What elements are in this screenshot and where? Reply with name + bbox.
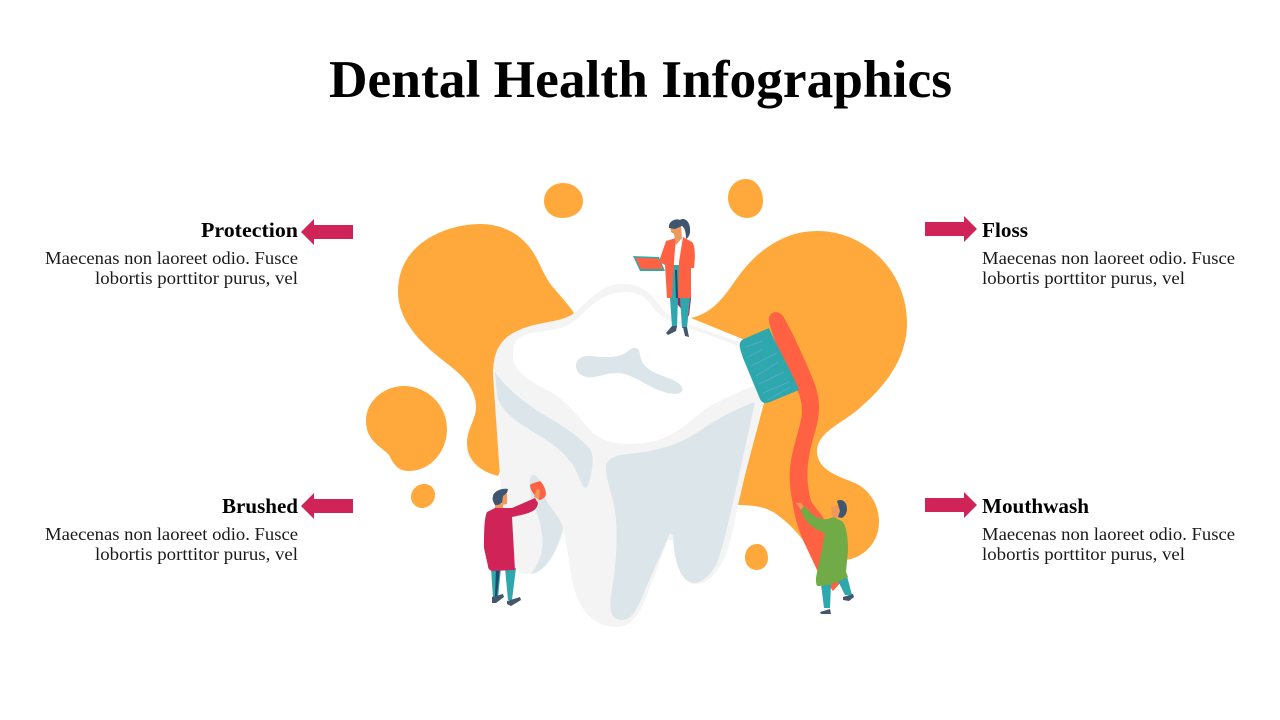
character: man cleaning tooth bbox=[484, 481, 546, 606]
brush bristles bbox=[740, 328, 799, 403]
face bbox=[831, 505, 842, 519]
tablet bbox=[633, 256, 665, 271]
description: Maecenas non laoreet odio. Fusce bbox=[45, 524, 298, 544]
character: woman with tablet bbox=[633, 219, 695, 337]
trousers bbox=[672, 298, 691, 316]
item: Brushed bbox=[45, 494, 298, 564]
toothbrush bbox=[740, 312, 841, 591]
face bbox=[501, 494, 507, 505]
tooth shading: top groove bbox=[576, 348, 682, 394]
cleaning cloth bbox=[530, 481, 546, 500]
shirt bbox=[674, 238, 683, 265]
heading: Protection bbox=[201, 218, 298, 242]
shoes bbox=[492, 594, 521, 606]
shoes bbox=[666, 326, 689, 337]
heading: Brushed bbox=[222, 494, 298, 518]
arrow: Mouthwash bbox=[925, 492, 977, 518]
item: Floss bbox=[982, 218, 1235, 288]
heading: Floss bbox=[982, 218, 1028, 242]
item: Brushed: lobortis porttitor purus, vel bbox=[95, 544, 298, 564]
orange blob: right bbox=[691, 231, 907, 570]
raised hand bbox=[796, 503, 806, 511]
tooth shading: right root bbox=[606, 402, 755, 620]
shoes bbox=[820, 594, 854, 614]
orange drop: top left bbox=[544, 183, 583, 218]
arrow: Protection bbox=[301, 219, 353, 245]
coat bbox=[659, 237, 695, 298]
orange drop: left circle bbox=[366, 386, 447, 471]
orange blob: left bbox=[398, 224, 574, 476]
hair bbox=[669, 219, 690, 239]
illustration: tooth with characters bbox=[366, 179, 907, 627]
orange drop: lower left bbox=[411, 484, 435, 508]
description: Maecenas non laoreet odio. Fusce bbox=[45, 248, 298, 268]
orange drop: lower right bbox=[745, 544, 768, 570]
tooth body bbox=[493, 284, 765, 627]
neck and face bbox=[670, 226, 682, 245]
item: Protection bbox=[45, 218, 298, 288]
description: Maecenas non laoreet odio. Fusce bbox=[982, 524, 1235, 544]
item: Mouthwash: lobortis porttitor purus, vel bbox=[982, 544, 1185, 564]
description: Maecenas non laoreet odio. Fusce bbox=[982, 248, 1235, 268]
hand bbox=[485, 549, 489, 559]
tooth shading: left root band bbox=[495, 372, 593, 488]
item: Protection: lobortis porttitor purus, vel bbox=[95, 268, 298, 288]
hair bbox=[837, 500, 847, 518]
item: Floss: lobortis porttitor purus, vel bbox=[982, 268, 1185, 288]
robe bbox=[801, 507, 848, 586]
heading: Mouthwash bbox=[982, 494, 1089, 518]
brush handle bbox=[769, 312, 841, 591]
hair bbox=[493, 489, 508, 505]
character: man holding toothbrush bbox=[796, 500, 854, 614]
trousers bbox=[491, 568, 516, 600]
arrow: Floss bbox=[925, 216, 977, 242]
coat bbox=[484, 498, 538, 571]
orange drop: top right bbox=[728, 179, 763, 218]
raised hand bbox=[534, 489, 540, 499]
title: Dental Health Infographics bbox=[329, 51, 952, 109]
tooth crown highlight bbox=[513, 292, 762, 444]
arrow: Brushed bbox=[301, 493, 353, 519]
tooth shading: small root bbox=[529, 475, 563, 574]
trousers bbox=[821, 576, 852, 608]
neck bbox=[495, 504, 503, 510]
item: Mouthwash bbox=[982, 494, 1235, 564]
